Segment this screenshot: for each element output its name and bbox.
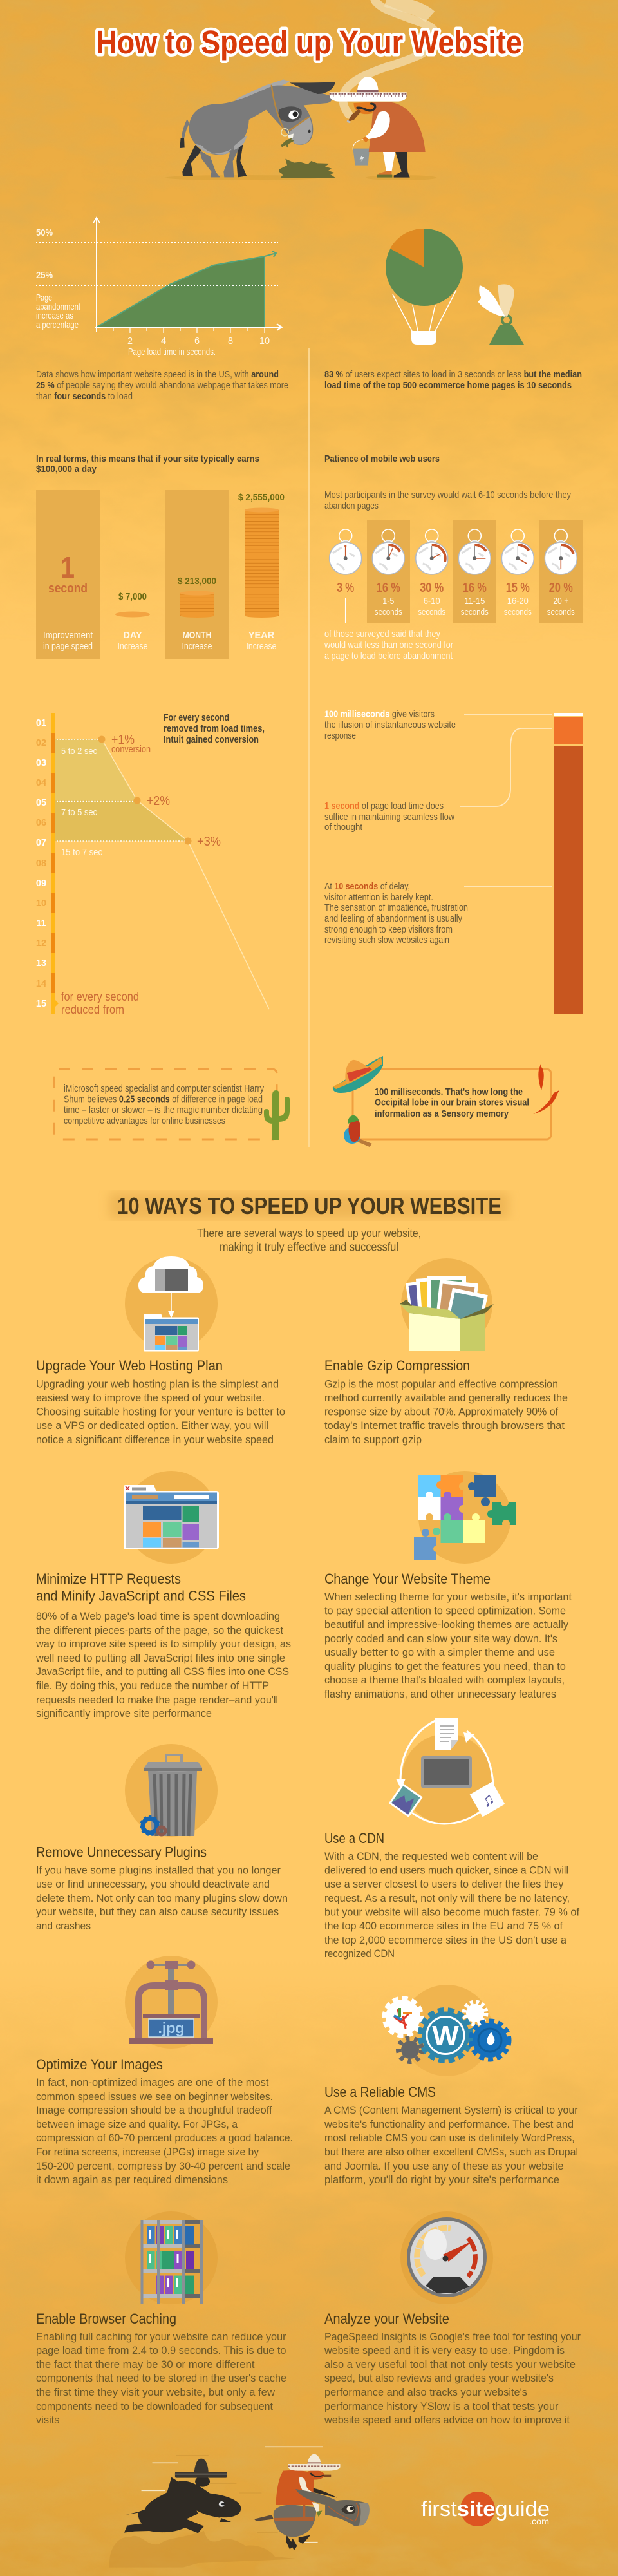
item: web hosting: easiest way to improve the speed of your website.: [36, 1392, 265, 1404]
text: 10 seconds: and feeling of abandonment is usually: [324, 914, 463, 924]
timeline: conversion chart: 09: [36, 878, 46, 889]
icon: gzip box: [400, 1258, 494, 1351]
icon: hot air balloon and weight: [386, 229, 524, 345]
line chart: page abandonment: a percentage: [36, 320, 79, 330]
text: 10 seconds: strong enough to keep visitors from: [324, 925, 453, 935]
bar chart: revenue increase: Increase: [182, 641, 212, 652]
text: under one second: of those surveyed said that they: [324, 629, 441, 639]
item: plugins: and crashes: [36, 1920, 91, 1932]
item: images: Optimize Your Images: [36, 2056, 163, 2072]
divider: [308, 348, 310, 1147]
item: images: between image size and quality. For JPGs, a: [36, 2118, 238, 2130]
item: analyze: website speed and offers advice on how to improve it: [324, 2414, 570, 2426]
item: http requests: well need to putting all JavaScript files into one single: [35, 1652, 285, 1664]
item: caching: the fact that there may be 30 or more different: [36, 2358, 255, 2371]
item: analyze: PageSpeed Insights is Google's free tool for testing your: [324, 2331, 581, 2343]
item: plugins: your website, but they can also cause security issues: [36, 1906, 279, 1918]
timeline: conversion chart: conversion: [111, 744, 151, 755]
item: images: In fact, non-optimized images are one of the most: [36, 2076, 269, 2088]
icon: image press: .jpg: [158, 2020, 184, 2036]
heading: real terms: $100,000 a day: [36, 464, 97, 475]
logo: firstsiteguide: firstsiteguide: [421, 2497, 550, 2521]
line chart: page abandonment: Page load time in seconds.: [128, 347, 216, 357]
item: analyze: performance history YSlow is a tool that tests your: [324, 2400, 559, 2412]
item: web hosting: Choosing suitable hosting for your venture is better to: [36, 1405, 285, 1418]
item: cms: most reliable CMS you can use is definitely WordPress,: [324, 2132, 575, 2144]
item: web hosting: [36, 1358, 285, 1446]
item: cdn: With a CDN, the requested web content will be: [324, 1850, 538, 1862]
item: cdn: recognized CDN: [324, 1947, 395, 1960]
timeline: conversion chart: 02: [36, 738, 46, 748]
item: images: For retina screens, increase (JPGs) image size by: [36, 2146, 259, 2158]
item: theme: quality plugins to get the features you need, than to: [324, 1660, 566, 1672]
text: 1 second: 1 second of page load time does: [324, 801, 444, 811]
illustration: racing donkeys: [109, 2447, 370, 2568]
bar chart: revenue increase: DAY: [123, 630, 142, 641]
icon: trash can: [125, 1744, 218, 1837]
item: cms: platform, you'll do right by your site's performance: [324, 2174, 559, 2186]
text: 10 seconds: visitor attention is barely kept.: [324, 893, 433, 903]
timeline: conversion chart: 11: [36, 918, 46, 929]
item: cdn: but your website will also become much faster. 79 % of: [324, 1906, 579, 1918]
item: theme: [324, 1571, 572, 1700]
text: intuit conversion: For every second: [164, 713, 229, 723]
timeline: conversion chart: 13: [36, 958, 46, 969]
stopwatch chart: patience: 15 %: [506, 581, 530, 595]
stopwatch chart: patience: 1-5: [382, 596, 394, 607]
line chart: page abandonment: 8: [228, 336, 233, 346]
item: cms: Use a Reliable CMS: [324, 2084, 436, 2100]
item: images: 150-200 percent, compress by 30-40 percent and scale: [36, 2160, 290, 2172]
item: plugins: Remove Unnecessary Plugins: [36, 1844, 207, 1860]
timeline: conversion chart: 15: [36, 999, 46, 1009]
item: gzip: response size by about 70%. Approximately 90% of: [324, 1405, 558, 1418]
icon: maracas: [344, 1115, 372, 1147]
text: intuit conversion: [164, 713, 265, 745]
text: 1 second: of thought: [324, 822, 362, 833]
text: abandonment stat: [36, 370, 288, 402]
bar chart: revenue increase: MONTH: [183, 630, 211, 641]
timeline: conversion chart: 06: [36, 818, 46, 828]
item: gzip: claim to support gzip: [324, 1434, 422, 1446]
icon: cdn: ♫: [478, 1788, 498, 1812]
subheading: making it truly effective and successful: [220, 1240, 398, 1253]
item: gzip: Gzip is the most popular and effective compression: [324, 1378, 558, 1390]
bar chart: revenue increase: second: [48, 582, 88, 596]
heading: mobile patience: Patience of mobile web users: [324, 454, 440, 464]
stopwatch chart: patience: 11-15: [464, 596, 485, 607]
text: median load time: 83 % of users expect sites to load in 3 seconds or less but the median: [324, 370, 582, 380]
text: 10 seconds: At 10 seconds of delay,: [324, 882, 410, 892]
text: abandonment stat: Data shows how important website speed is in the US, with around: [36, 370, 279, 380]
stopwatch chart: patience: seconds: [418, 607, 445, 618]
item: http requests: requests needed to make the page render–and you'll: [36, 1694, 278, 1706]
stopwatch chart: patience: seconds: [547, 607, 575, 618]
timeline: conversion chart: +1%: [111, 733, 135, 747]
item: web hosting: Upgrade Your Web Hosting Plan: [36, 1358, 223, 1374]
item: cms: but there are also other excellent CMSs, such as Drupal: [324, 2146, 578, 2158]
text: median load time: load time of the top 500 ecommerce home pages is 10 seconds: [324, 381, 572, 391]
item: cms: A CMS (Content Management System) is critical to your: [324, 2104, 578, 2116]
item: gzip: today's Internet traffic travels through browsers that: [324, 1419, 565, 1432]
timeline: conversion chart: 7 to 5 sec: [61, 808, 97, 818]
item: plugins: If you have some plugins installed that you no longer: [36, 1864, 281, 1877]
callout: Harry Shum: iMicrosoft speed specialist and computer scientist Harry: [64, 1084, 265, 1094]
timeline: conversion chart: for every second: [61, 990, 139, 1004]
item: images: [36, 2056, 293, 2186]
heading: 10 ways: 10 WAYS TO SPEED UP YOUR WEBSITE: [117, 1193, 501, 1219]
text: 100 milliseconds: response: [324, 731, 356, 741]
icon: browser: [124, 1471, 219, 1564]
item: cms: [324, 2084, 578, 2186]
item: http requests: file. By doing this, you reduce the number of HTTP: [36, 1680, 269, 1692]
item: caching: Enable Browser Caching: [36, 2311, 176, 2327]
logo: firstsiteguide: .com: [529, 2516, 549, 2526]
item: theme: Change Your Website Theme: [324, 1571, 491, 1587]
item: http requests: way to improve site speed is to simplify your design, as: [35, 1638, 291, 1650]
item: http requests: the different pieces-parts of the page, so the quickest: [36, 1624, 283, 1636]
callout: Harry Shum: time – faster or slower – is the magic number dictating: [64, 1105, 263, 1115]
text: intuit conversion: removed from load times,: [164, 724, 265, 734]
text: survey intro: Most participants in the survey would wait 6-10 seconds before they: [324, 490, 572, 500]
timeline: conversion chart: 07: [36, 838, 46, 848]
stopwatch chart: patience: [330, 520, 583, 623]
bar chart: revenue increase: Improvement: [43, 630, 93, 641]
item: theme: choose a theme that's bloated with complex layouts,: [324, 1674, 565, 1686]
logo: firstsiteguide: [421, 2492, 550, 2526]
item: images: common speed issues we see on beginner websites.: [36, 2090, 273, 2103]
stopwatch chart: patience: 20 +: [553, 596, 568, 607]
callout: occipital lobe: Occipital lobe in our brain stores visual: [375, 1097, 529, 1108]
item: theme: When selecting theme for your website, it's important: [324, 1591, 572, 1603]
stopwatch chart: patience: seconds: [375, 607, 402, 618]
icon: cactus: [264, 1090, 290, 1140]
bar chart: revenue increase: 1: [61, 551, 75, 584]
bar chart: revenue increase: $ 2,555,000: [238, 493, 285, 503]
timeline: conversion chart: 08: [36, 858, 46, 869]
text: 10 seconds: [324, 882, 468, 945]
timeline: conversion chart: 14: [36, 979, 46, 989]
text: under one second: [324, 629, 453, 661]
item: cdn: the top 400 ecommerce sites in the EU and 75 % of: [324, 1920, 563, 1932]
icon: shelves: [125, 2211, 218, 2304]
item: analyze: website speed and it is very easy to use. Pingdom is: [324, 2344, 565, 2356]
item: plugins: delete them. Not only can too many plugins slow down: [36, 1892, 288, 1904]
stopwatch chart: patience: 30 %: [420, 581, 444, 595]
stopwatch chart: patience: 6-10: [424, 596, 440, 607]
item: theme: to pay special attention to speed optimization. Some: [324, 1605, 566, 1616]
stopwatch chart: patience: 20 %: [549, 581, 573, 595]
icon: sombrero: [333, 1056, 383, 1093]
item: analyze: Analyze your Website: [324, 2311, 449, 2327]
item: gzip: [324, 1358, 568, 1446]
timeline: conversion chart: 03: [36, 758, 46, 768]
heading glow: [109, 1193, 509, 1218]
item: cdn: request. As a result, not only will there be no latency,: [324, 1892, 570, 1904]
line chart: page abandonment: 6: [194, 336, 200, 346]
icon: web hosting: [125, 1256, 218, 1351]
illustration: donkey and man: [165, 77, 436, 180]
item: analyze: performance and also tracks your website's: [324, 2386, 527, 2398]
text: 100 milliseconds: 100 milliseconds give visitors: [324, 710, 435, 720]
item: http requests: JavaScript file, and to putting all CSS files into one CSS: [36, 1665, 289, 1678]
line chart: page abandonment: Page: [36, 293, 52, 303]
item: gzip: Enable Gzip Compression: [324, 1358, 470, 1374]
bar chart: revenue increase: [36, 490, 285, 659]
icon: image press: [125, 1956, 218, 2049]
line chart: page abandonment: [36, 218, 282, 357]
item: caching: components that need to be stored in the user's cache: [36, 2372, 286, 2384]
line chart: page abandonment: 10: [259, 336, 270, 346]
icon: chili peppers: [533, 1062, 559, 1114]
timeline: conversion chart: 10: [36, 898, 46, 909]
stopwatch chart: patience: 16-20: [507, 596, 529, 607]
text: median load time: [324, 370, 582, 391]
item: cdn: use a server closest to users to deliver the files they: [324, 1878, 564, 1890]
callout: occipital lobe: information as a Sensory memory: [375, 1109, 509, 1119]
item: http requests: and Minify JavaScript and CSS Files: [36, 1588, 246, 1604]
text: under one second: a page to load before abandonment: [324, 651, 453, 661]
stopwatch chart: patience: 16 %: [463, 581, 487, 595]
stopwatch chart: patience: 16 %: [377, 581, 400, 595]
text: 1 second: suffice in maintaining seamless flow: [324, 812, 454, 822]
timeline: conversion chart: [36, 713, 269, 1017]
line chart: page abandonment: 50%: [36, 228, 53, 238]
text: 100 milliseconds: [324, 710, 456, 741]
timeline: conversion chart: 5 to 2 sec: [61, 746, 97, 757]
callout: Harry Shum: Shum believes 0.25 seconds of difference in page load: [64, 1095, 263, 1105]
text: 1 second: [324, 801, 454, 833]
callout: occipital lobe: [353, 1069, 551, 1139]
text: 10 seconds: The sensation of impatience, frustration: [324, 903, 468, 913]
timeline: conversion chart: 12: [36, 938, 46, 949]
title: How to Speed up Your Website: [96, 24, 522, 61]
icon: speed gauge: [400, 2211, 493, 2304]
text: 100 milliseconds: the illusion of instantaneous website: [324, 720, 456, 730]
item: caching: visits: [36, 2414, 59, 2426]
icon: cms gears: [384, 1985, 509, 2076]
timeline: conversion chart: 05: [36, 798, 46, 808]
bar chart: revenue increase: $ 7,000: [118, 592, 147, 602]
line chart: page abandonment: 2: [127, 336, 133, 346]
item: analyze: speed, but also reviews and grades your website's: [324, 2372, 554, 2384]
line chart: page abandonment: 25%: [36, 270, 53, 281]
smoke: [343, 0, 436, 115]
stopwatch chart: patience: 3 %: [337, 581, 354, 595]
item: theme: poorly coded and can slow your site way down. It's: [324, 1633, 557, 1645]
subheading: [197, 1227, 421, 1253]
text: 10 seconds: revisiting such slow websites again: [324, 935, 449, 945]
item: theme: beautiful and impressive-looking themes are actually: [324, 1618, 568, 1631]
timeline: conversion chart: 01: [36, 718, 46, 728]
text: survey intro: abandon pages: [324, 501, 379, 511]
line chart: page abandonment: 4: [161, 336, 166, 346]
timeline: conversion chart: reduced from: [61, 1003, 124, 1017]
line chart: page abandonment: abandonment: [36, 302, 80, 312]
item: analyze: [324, 2311, 581, 2426]
icon: cdn: [389, 1718, 505, 1824]
item: http requests: 80% of a Web page's load time is spent downloading: [36, 1610, 280, 1622]
callout: occipital lobe: 100 milliseconds. That's how long the: [375, 1087, 523, 1097]
heading: real terms: [36, 454, 259, 475]
item: caching: Enabling full caching for your website can reduce your: [36, 2331, 286, 2343]
text: intuit conversion: Intuit gained conversion: [164, 735, 259, 745]
stopwatch chart: patience: seconds: [461, 607, 489, 618]
subheading: There are several ways to speed up your website,: [197, 1227, 421, 1240]
text: survey intro: [324, 490, 572, 511]
item: cms: and Joomla. If you use any of these as your website: [324, 2160, 564, 2172]
callout: Harry Shum: [54, 1069, 277, 1139]
item: web hosting: notice a significant difference in your website speed: [36, 1434, 274, 1446]
item: images: compression of 60-70 percent produces a good balance.: [36, 2132, 293, 2144]
item: gzip: method currently available and generally reduces the: [324, 1392, 568, 1404]
item: theme: usually better to go with a simpler theme and use: [324, 1646, 555, 1658]
timeline: conversion chart: +2%: [147, 794, 170, 808]
item: caching: the first time they visit your website, but only a few: [36, 2386, 276, 2398]
item: web hosting: Upgrading your web hosting plan is the simplest and: [36, 1378, 279, 1390]
text: abandonment stat: 25 % of people saying they would abandona webpage that takes more: [36, 381, 288, 391]
bar chart: revenue increase: Increase: [117, 641, 148, 652]
item: cdn: [324, 1830, 579, 1960]
item: http requests: significantly improve site performance: [36, 1707, 212, 1719]
item: plugins: [36, 1844, 288, 1932]
item: analyze: also a very useful tool that not only tests your website: [324, 2358, 576, 2371]
stopwatch chart: patience: seconds: [504, 607, 532, 618]
callout: Harry Shum: competitive advantages for online businesses: [64, 1116, 225, 1126]
item: cdn: the top 2,000 ecommerce sites in the US don't use a: [324, 1934, 567, 1946]
item: plugins: use or find unnecessary, you should deactivate and: [36, 1878, 270, 1890]
item: theme: flashy animations, and other unnecessary features: [324, 1688, 556, 1700]
timeline: conversion chart: 04: [36, 778, 46, 788]
item: cms: website's functionality and performance. The best and: [324, 2118, 574, 2130]
item: images: it down again as per required dimensions: [36, 2174, 228, 2186]
item: web hosting: use a VPS or dedicated option. Either way, you will: [36, 1419, 268, 1432]
text: under one second: would wait less than one second for: [324, 640, 453, 650]
item: cdn: delivered to end users much quicker, since a CDN will: [324, 1864, 568, 1877]
bar chart: revenue increase: Increase: [246, 641, 277, 652]
item: caching: [36, 2311, 286, 2426]
item: caching: components need to be downloaded for subsequent: [36, 2400, 273, 2412]
heading: real terms: In real terms, this means that if your site typically earns: [36, 454, 259, 464]
item: http requests: [35, 1571, 291, 1719]
item: caching: page load time from 2.4 to 0.9 seconds. This is due to: [36, 2344, 286, 2356]
item: http requests: Minimize HTTP Requests: [36, 1571, 181, 1587]
timeline: conversion chart: +3%: [197, 835, 221, 849]
text: abandonment stat: than four seconds to load: [36, 392, 133, 402]
timeline: conversion chart: 15 to 7 sec: [61, 848, 102, 858]
item: images: Image compression should be a thoughtful tradeoff: [36, 2104, 272, 2116]
bar chart: revenue increase: $ 213,000: [178, 576, 216, 587]
line chart: page abandonment: increase as: [36, 311, 73, 321]
bar chart: revenue increase: in page speed: [43, 641, 93, 652]
icon: puzzle: [414, 1471, 516, 1564]
bar chart: revenue increase: YEAR: [248, 630, 275, 641]
bar: response time thresholds: [460, 713, 583, 1014]
item: cdn: Use a CDN: [324, 1830, 384, 1846]
icon: cms gears: W: [432, 2020, 459, 2052]
